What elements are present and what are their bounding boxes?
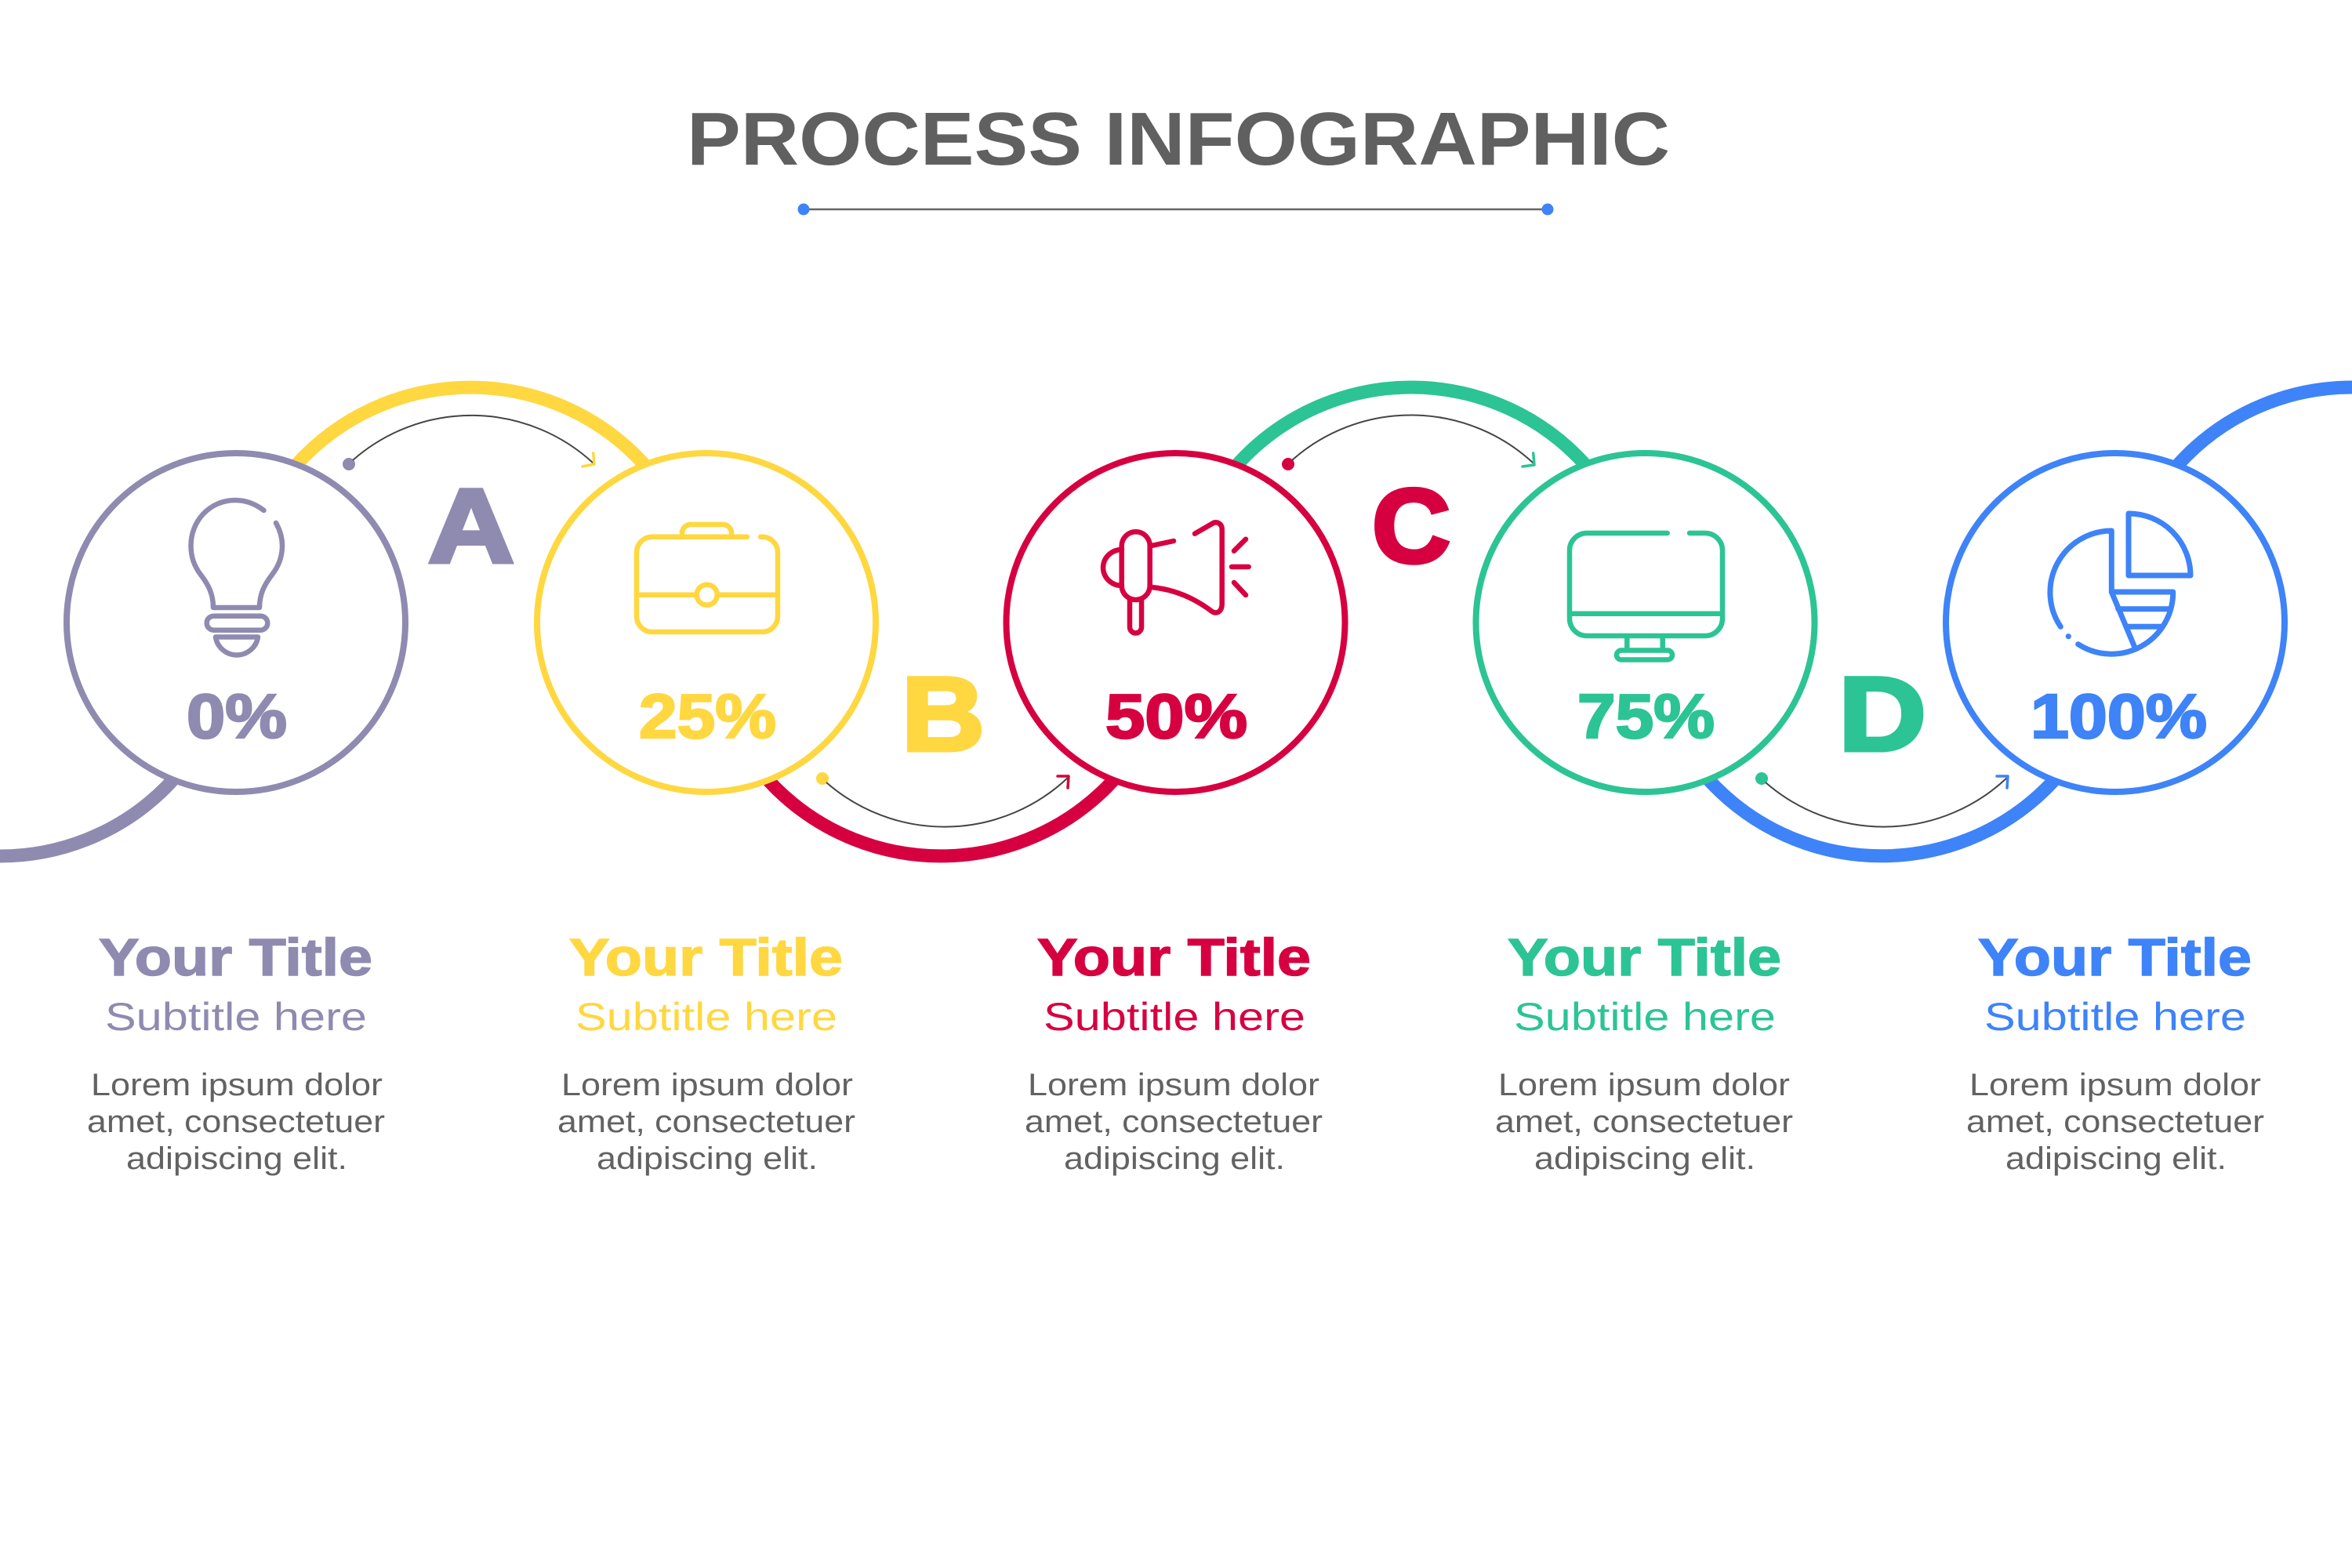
body copy: adipiscing elit. xyxy=(1064,1142,1285,1176)
icon: monitor xyxy=(1570,533,1722,660)
body copy: amet, consectetuer xyxy=(1966,1105,2264,1139)
arc: yellow xyxy=(236,387,705,622)
percentage: 100%: 100% xyxy=(2031,681,2207,751)
subtitle: Subtitle here xyxy=(1514,995,1776,1039)
heading: Your Title xyxy=(1037,928,1311,987)
step 4 circle: monitor, 75% xyxy=(1475,453,1814,792)
step 2 circle: briefcase, 25% xyxy=(537,453,876,792)
letter C: C xyxy=(1372,468,1450,585)
subtitle: Subtitle here xyxy=(1044,995,1305,1039)
letter D: D xyxy=(1838,656,1926,773)
body copy: Lorem ipsum dolor xyxy=(91,1068,383,1102)
step 1 circle: bulb, 0% xyxy=(67,453,405,792)
step 5 circle: pie chart, 100% xyxy=(1946,453,2285,792)
body copy: adipiscing elit. xyxy=(1534,1142,1755,1176)
connector arcs xyxy=(0,387,2352,856)
arc: green xyxy=(1177,387,1646,622)
title: PROCESS INFOGRAPHIC xyxy=(687,97,1670,181)
percentage: 75%: 75% xyxy=(1577,681,1715,751)
title underline with end dots xyxy=(798,204,1554,215)
letter A: A xyxy=(428,468,514,585)
text block 2 xyxy=(557,928,855,1176)
percentage: 50%: 50% xyxy=(1105,681,1247,751)
text block 1 xyxy=(87,928,385,1176)
body copy: Lorem ipsum dolor xyxy=(1969,1068,2261,1102)
text block 4 xyxy=(1495,928,1793,1176)
arc: blue lead-out xyxy=(2118,387,2352,622)
icon: briefcase xyxy=(637,524,778,632)
subtitle: Subtitle here xyxy=(575,995,837,1039)
body copy: amet, consectetuer xyxy=(1495,1105,1793,1139)
arc: blue xyxy=(1647,622,2116,856)
arc: purple lead-in xyxy=(0,622,234,856)
body copy xyxy=(557,1068,855,1176)
icon: light bulb xyxy=(191,500,282,655)
heading: Your Title xyxy=(1508,928,1781,987)
body copy: adipiscing elit. xyxy=(126,1142,347,1176)
body copy: Lorem ipsum dolor xyxy=(561,1068,853,1102)
body copy: amet, consectetuer xyxy=(557,1105,855,1139)
heading: Your Title xyxy=(569,928,843,987)
body copy xyxy=(1966,1068,2264,1176)
body copy xyxy=(1025,1068,1323,1176)
subtitle: Subtitle here xyxy=(105,995,367,1039)
body copy: adipiscing elit. xyxy=(597,1142,818,1176)
body copy: Lorem ipsum dolor xyxy=(1028,1068,1319,1102)
body copy xyxy=(1495,1068,1793,1176)
text block 3 xyxy=(1025,928,1323,1176)
step 3 circle: megaphone, 50% xyxy=(1007,453,1345,792)
arrow B xyxy=(816,772,1069,827)
text block 5 xyxy=(1966,928,2264,1176)
subtitle: Subtitle here xyxy=(1984,995,2246,1039)
percentage: 0%: 0% xyxy=(187,681,287,751)
body copy: adipiscing elit. xyxy=(2005,1142,2227,1176)
arrow A xyxy=(343,416,594,470)
heading: Your Title xyxy=(99,928,372,987)
percentage: 25%: 25% xyxy=(639,681,776,751)
arrow D xyxy=(1755,772,2008,827)
icon: megaphone xyxy=(1103,522,1249,633)
body copy xyxy=(87,1068,385,1176)
heading: Your Title xyxy=(1978,928,2252,987)
icon: pie chart xyxy=(2050,514,2190,654)
letter B: B xyxy=(902,656,985,773)
arc: red xyxy=(706,622,1175,856)
body copy: amet, consectetuer xyxy=(87,1105,385,1139)
body copy: Lorem ipsum dolor xyxy=(1498,1068,1790,1102)
body copy: amet, consectetuer xyxy=(1025,1105,1323,1139)
arrow C xyxy=(1282,415,1534,470)
